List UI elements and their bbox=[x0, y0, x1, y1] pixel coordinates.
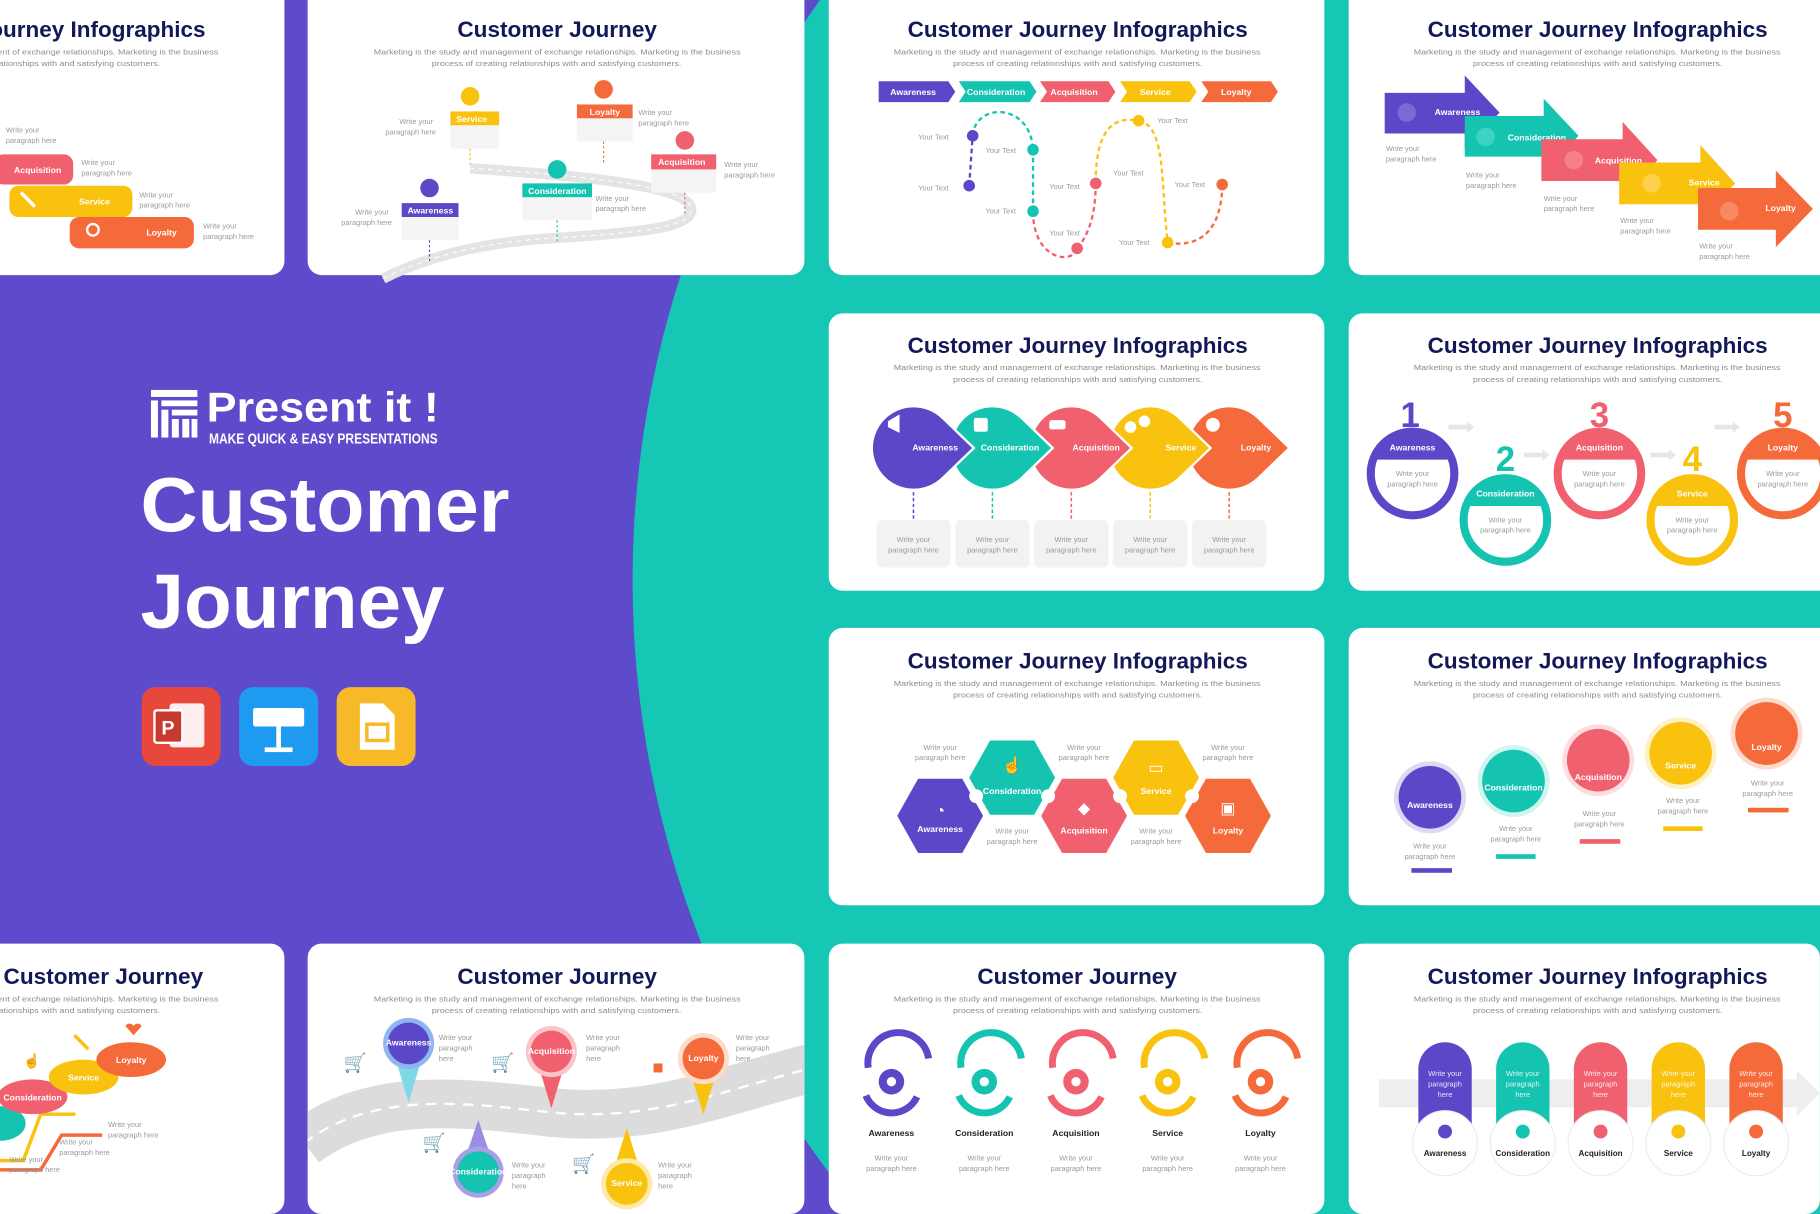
panel: card J road pins: here bbox=[512, 1181, 527, 1190]
panel: card J road pins: 🛒 bbox=[572, 1153, 595, 1175]
panel: card B road pins: Write your bbox=[355, 208, 389, 217]
panel: card K circular arrows bbox=[829, 944, 1324, 1214]
panel: card I (bottom-left partial): paragraph here bbox=[108, 1130, 159, 1139]
panel: card G hexagons: Consideration bbox=[983, 786, 1041, 796]
panel: card A (top-left partial): Write your bbox=[81, 158, 115, 167]
panel: card A (top-left partial): Loyalty bbox=[146, 228, 177, 238]
panel: card L capsules: Consideration bbox=[1496, 1149, 1550, 1158]
panel: card J road pins: process of creating relationships with and satisfying customers. bbox=[432, 1006, 681, 1015]
panel: card B road pins: paragraph here bbox=[595, 204, 646, 213]
panel: card F numbered circles: Marketing is the study and management of exchange relationships. Marketing is the business bbox=[1414, 363, 1781, 372]
panel: card J road pins: Customer Journey bbox=[457, 964, 658, 989]
panel: card B road pins: Consideration bbox=[528, 186, 587, 196]
background teal circle bbox=[633, 0, 1820, 1214]
panel: card C wave: Your Text bbox=[1157, 116, 1188, 125]
panel: card E drops: paragraph here bbox=[967, 545, 1018, 554]
icon: google slides bbox=[337, 687, 416, 766]
panel: card F numbered circles: 2 bbox=[1496, 440, 1515, 479]
panel: card L capsules: here bbox=[1749, 1090, 1764, 1099]
panel: card A (top-left partial): Write your bbox=[139, 190, 173, 199]
panel: card B road pins: Loyalty bbox=[590, 107, 620, 117]
panel: card K circular arrows: Loyalty bbox=[1245, 1128, 1276, 1138]
panel: card D arrows: Marketing is the study and management of exchange relationships. Marketing is the business bbox=[1414, 48, 1781, 57]
panel: card D arrows: Write your bbox=[1466, 171, 1500, 180]
panel: card D arrows: Consideration bbox=[1508, 132, 1566, 142]
panel: card G hexagons: Write your bbox=[995, 826, 1029, 835]
panel: card F numbered circles: Write your bbox=[1583, 469, 1617, 478]
panel: card F numbered circles: 1 bbox=[1401, 396, 1420, 435]
panel: card J road pins: here bbox=[736, 1054, 751, 1063]
panel: card G hexagons: process of creating relationships with and satisfying customers. bbox=[953, 691, 1202, 700]
panel: card K circular arrows: Write your bbox=[875, 1154, 909, 1163]
panel: card E drops: paragraph here bbox=[888, 545, 939, 554]
panel: card D arrows: Write your bbox=[1544, 194, 1578, 203]
panel: card C wave: process of creating relationships with and satisfying customers. bbox=[953, 59, 1202, 68]
tagline: MAKE QUICK & EASY PRESENTATIONS bbox=[209, 430, 438, 447]
panel: card B road pins: Write your bbox=[724, 160, 758, 169]
panel: card H rising circles: Awareness bbox=[1407, 800, 1453, 810]
panel: card J road pins: paragraph bbox=[658, 1171, 692, 1180]
panel: card H rising circles: paragraph here bbox=[1405, 852, 1455, 861]
panel: card K circular arrows: Customer Journey bbox=[977, 964, 1178, 989]
panel: card G hexagons: ▭ bbox=[1148, 759, 1164, 777]
panel: card F numbered circles: paragraph here bbox=[1667, 526, 1718, 535]
panel: card J road pins: Write your bbox=[658, 1161, 692, 1170]
panel: card A (top-left partial): Write your bbox=[203, 222, 237, 231]
panel: card C wave: Marketing is the study and management of exchange relationships. Marketing is the business bbox=[894, 48, 1261, 57]
panel: card D arrows: paragraph here bbox=[1620, 226, 1671, 235]
panel: card I (bottom-left partial): Service bbox=[68, 1073, 99, 1083]
panel: card J road pins: Write your bbox=[736, 1033, 770, 1042]
panel: card C wave bbox=[829, 0, 1324, 275]
icon: powerpoint bbox=[142, 687, 221, 766]
panel: card H rising circles: Service bbox=[1665, 760, 1696, 770]
panel: card L capsules: Write your bbox=[1584, 1069, 1618, 1078]
panel: card G hexagons: Loyalty bbox=[1213, 825, 1243, 835]
panel: card B road pins: Marketing is the study and management of exchange relationships. Marketing is the business bbox=[374, 48, 741, 57]
panel: card J road pins: Awareness bbox=[386, 1038, 432, 1048]
panel: card C wave: Your Text bbox=[985, 146, 1016, 155]
panel: card L capsules: Write your bbox=[1662, 1069, 1696, 1078]
panel: card L capsules: process of creating relationships with and satisfying customers. bbox=[1473, 1006, 1722, 1015]
panel: card J road pins: here bbox=[439, 1054, 454, 1063]
panel: card K circular arrows: Write your bbox=[967, 1154, 1002, 1163]
panel: card J road pins: paragraph bbox=[512, 1171, 546, 1180]
panel: card B road pins: process of creating relationships with and satisfying customers. bbox=[432, 59, 681, 68]
panel: card B road pins bbox=[308, 0, 804, 279]
panel: card D arrows: Service bbox=[1689, 178, 1720, 188]
panel: card G hexagons: paragraph here bbox=[987, 837, 1037, 846]
panel: card H rising circles bbox=[1349, 628, 1820, 905]
icon: keynote bbox=[239, 687, 318, 766]
panel: card L capsules: paragraph bbox=[1506, 1079, 1540, 1088]
panel: card K circular arrows: paragraph here bbox=[959, 1164, 1010, 1173]
panel: card K circular arrows: Consideration bbox=[955, 1128, 1013, 1138]
panel: card E drops: paragraph here bbox=[1125, 545, 1176, 554]
panel: card I (bottom-left partial): paragraph here bbox=[9, 1165, 60, 1174]
logo text: Present it ! bbox=[207, 383, 439, 430]
chevrons bbox=[879, 81, 1278, 102]
panel: card J road pins: Write your bbox=[512, 1161, 546, 1170]
panel: card F numbered circles: Awareness bbox=[1390, 442, 1436, 452]
panel: card L capsules: Customer Journey Infographics bbox=[1428, 964, 1768, 989]
panel: card G hexagons: paragraph here bbox=[915, 753, 966, 762]
panel: card E drops: Service bbox=[1165, 442, 1196, 452]
panel: card E drops: paragraph here bbox=[1204, 545, 1254, 554]
panel: card I (bottom-left partial): Write your bbox=[108, 1120, 142, 1129]
panel: card A (top-left partial): paragraph here bbox=[6, 136, 57, 145]
panel: card J road pins: Service bbox=[611, 1178, 642, 1188]
panel: card L capsules: Service bbox=[1664, 1149, 1693, 1158]
panel: card C wave: Your Text bbox=[918, 183, 949, 192]
panel: card H rising circles: process of creating relationships with and satisfying customers. bbox=[1473, 691, 1722, 700]
panel: card L capsules: Write your bbox=[1428, 1069, 1462, 1078]
panel: card J road pins: Consideration bbox=[449, 1167, 507, 1177]
panel: left brand block bbox=[141, 383, 510, 766]
panel: card H rising circles: Acquisition bbox=[1575, 772, 1622, 782]
panel: card F numbered circles: Consideration bbox=[1476, 489, 1535, 499]
panel: card J road pins: here bbox=[658, 1181, 673, 1190]
panel: card E drops: Write your bbox=[1055, 535, 1089, 544]
panel: card L capsules: Awareness bbox=[1424, 1149, 1467, 1158]
panel: card I (bottom-left partial): Loyalty bbox=[116, 1055, 147, 1065]
chevrons: Awareness bbox=[890, 87, 936, 97]
panel: card B road pins: paragraph here bbox=[341, 218, 392, 227]
panel: card L capsules: Marketing is the study and management of exchange relationships. Marketing is the business bbox=[1414, 995, 1781, 1004]
panel: card A (top-left partial): Service bbox=[79, 196, 110, 206]
pins: Service bbox=[456, 114, 487, 124]
panel: card G hexagons: Write your bbox=[1139, 826, 1173, 835]
panel: card K circular arrows: Acquisition bbox=[1052, 1128, 1100, 1138]
panel: card G hexagons: ▣ bbox=[1220, 800, 1236, 818]
panel: card E drops: Loyalty bbox=[1241, 442, 1271, 452]
panel: card E drops bbox=[829, 313, 1324, 591]
panel: card L capsules: Write your bbox=[1506, 1069, 1540, 1078]
panel: card J road pins: 🛒 bbox=[344, 1052, 367, 1074]
panel: card K circular arrows: Write your bbox=[1059, 1154, 1093, 1163]
panel: card G hexagons: paragraph here bbox=[1059, 753, 1109, 762]
panel: card C wave: Your Text bbox=[1119, 238, 1149, 247]
panel: card E drops: process of creating relationships with and satisfying customers. bbox=[953, 375, 1202, 384]
panel: card F numbered circles: Loyalty bbox=[1768, 442, 1798, 452]
panel: card G hexagons: paragraph here bbox=[1203, 753, 1253, 762]
panel: card E drops: Awareness bbox=[912, 442, 958, 452]
panel: card J road pins: Loyalty bbox=[688, 1053, 719, 1063]
icon: powerpoint: P bbox=[161, 718, 175, 740]
panel: card I (bottom-left partial) bbox=[0, 944, 284, 1214]
panel: card E drops: paragraph here bbox=[1046, 545, 1097, 554]
chevrons: Loyalty bbox=[1221, 87, 1252, 97]
panel: card A (top-left partial): Acquisition bbox=[14, 165, 61, 175]
panel: card A (top-left partial): Write your bbox=[6, 125, 40, 134]
panel: card J road pins: Marketing is the study and management of exchange relationships. Marketing is the business bbox=[374, 995, 741, 1004]
panel: card J road pins: paragraph bbox=[736, 1043, 770, 1052]
panel: card F numbered circles: paragraph here bbox=[1574, 479, 1625, 488]
panel: card A (top-left partial): paragraph here bbox=[139, 201, 190, 210]
panel: card J road pins: Acquisition bbox=[528, 1046, 575, 1056]
panel: card A (top-left partial): paragraph here bbox=[203, 232, 254, 241]
panel: card L capsules: Write your bbox=[1739, 1069, 1773, 1078]
panel: card G hexagons: Acquisition bbox=[1060, 825, 1108, 835]
road bbox=[383, 168, 691, 279]
panel: card B road pins: Customer Journey bbox=[457, 17, 658, 42]
panel: card F numbered circles: process of creating relationships with and satisfying customers. bbox=[1473, 375, 1722, 384]
panel: card K circular arrows: Awareness bbox=[869, 1128, 914, 1138]
panel: card C wave: Your Text bbox=[1049, 229, 1080, 238]
panel: card L capsules: here bbox=[1671, 1090, 1686, 1099]
panel: card E drops: Acquisition bbox=[1072, 442, 1120, 452]
panel: card F numbered circles: Write your bbox=[1489, 515, 1523, 524]
panel: card B road pins: paragraph here bbox=[638, 118, 689, 127]
panel: card D arrows: Write your bbox=[1699, 241, 1733, 250]
panel: card C wave: Your Text bbox=[1113, 168, 1144, 177]
panel: card D arrows: paragraph here bbox=[1386, 154, 1437, 163]
panel: card K circular arrows: paragraph here bbox=[866, 1164, 917, 1173]
panel: card H rising circles: Write your bbox=[1751, 779, 1785, 788]
panel: card D arrows: paragraph here bbox=[1466, 181, 1517, 190]
panel: card A (top-left partial): paragraph here bbox=[81, 168, 132, 177]
panel: card C wave: Your Text bbox=[1175, 180, 1205, 189]
panel: card F numbered circles bbox=[1349, 313, 1820, 591]
panel: card G hexagons: Customer Journey Infographics bbox=[908, 649, 1248, 674]
panel: card H rising circles: Loyalty bbox=[1751, 742, 1782, 752]
panel: card D arrows: process of creating relationships with and satisfying customers. bbox=[1473, 59, 1722, 68]
panel: card F numbered circles: 3 bbox=[1590, 396, 1609, 435]
panel: card F numbered circles: Customer Journey Infographics bbox=[1428, 333, 1768, 358]
panel: card C wave: Your Text bbox=[918, 132, 949, 141]
panel: card H rising circles: paragraph here bbox=[1742, 789, 1793, 798]
panel: card K circular arrows: paragraph here bbox=[1142, 1164, 1193, 1173]
panel: card H rising circles: Write your bbox=[1666, 796, 1700, 805]
panel: card L capsules: Acquisition bbox=[1578, 1149, 1623, 1158]
panel: card H rising circles: Write your bbox=[1499, 824, 1533, 833]
panel: card K circular arrows: Marketing is the study and management of exchange relationships. Marketing is the business bbox=[894, 995, 1261, 1004]
panel: card J road pins: here bbox=[586, 1054, 601, 1063]
panel: card E drops: Customer Journey Infographics bbox=[908, 333, 1248, 358]
panel: card F numbered circles: Write your bbox=[1396, 469, 1430, 478]
panel: card F numbered circles: Write your bbox=[1766, 469, 1800, 478]
panel: card D arrows: Write your bbox=[1620, 216, 1654, 225]
panel: card E drops: Write your bbox=[897, 535, 931, 544]
panel: card G hexagons: Write your bbox=[1211, 743, 1245, 752]
panel: card G hexagons: ☝ bbox=[1002, 755, 1022, 776]
panel: card B road pins: Write your bbox=[399, 117, 433, 126]
panel: card G hexagons: ◆ bbox=[1078, 800, 1091, 818]
panel: card D arrows: Acquisition bbox=[1595, 156, 1642, 166]
panel: card E drops: Write your bbox=[976, 535, 1010, 544]
main title: Customer bbox=[141, 464, 510, 549]
panel: card H rising circles: Consideration bbox=[1484, 782, 1543, 792]
panel: card H rising circles: Customer Journey Infographics bbox=[1428, 649, 1768, 674]
panel: card A (top-left partial) bbox=[0, 0, 284, 275]
chevrons: Consideration bbox=[967, 87, 1025, 97]
dashed wave bbox=[969, 112, 1222, 257]
panel: card K circular arrows: process of creating relationships with and satisfying customers. bbox=[953, 1006, 1202, 1015]
panel: card I (bottom-left partial): Consideration bbox=[3, 1092, 62, 1102]
panel: card H rising circles: paragraph here bbox=[1574, 819, 1625, 828]
panel: card H rising circles: Write your bbox=[1583, 809, 1617, 818]
panel: card E drops: Consideration bbox=[981, 442, 1039, 452]
panel: card K circular arrows: Service bbox=[1152, 1128, 1183, 1138]
panel: card I (bottom-left partial): paragraph here bbox=[59, 1148, 110, 1157]
icon: logo bbox=[151, 390, 197, 438]
panel: card D arrows: Loyalty bbox=[1765, 203, 1796, 213]
panel: card L capsules: paragraph bbox=[1661, 1079, 1695, 1088]
panel: card L capsules: here bbox=[1438, 1090, 1452, 1099]
panel: card L capsules: paragraph bbox=[1428, 1079, 1462, 1088]
panel: card D arrows: paragraph here bbox=[1699, 252, 1750, 261]
panel: card I (bottom-left partial): Write your bbox=[59, 1137, 93, 1146]
panel: card F numbered circles: 4 bbox=[1683, 440, 1703, 479]
panel: card F numbered circles: paragraph here bbox=[1480, 526, 1531, 535]
panel: card B road pins: paragraph here bbox=[724, 171, 775, 180]
panel: card L capsules: Loyalty bbox=[1742, 1149, 1771, 1158]
panel: card J road pins: 🛒 bbox=[491, 1052, 514, 1074]
panel: card F numbered circles: paragraph here bbox=[1387, 479, 1438, 488]
panel: card I (bottom-left partial): ☝ bbox=[23, 1051, 41, 1069]
panel: card D arrows: Customer Journey Infographics bbox=[1428, 17, 1768, 42]
panel: card K circular arrows: paragraph here bbox=[1235, 1164, 1286, 1173]
panel: card C wave: Customer Journey Infographics bbox=[908, 17, 1248, 42]
panel: card C wave: Your Text bbox=[985, 207, 1016, 216]
panel: card J road pins: Write your bbox=[439, 1033, 473, 1042]
panel: card E drops: Write your bbox=[1212, 535, 1246, 544]
panel: card K circular arrows: Write your bbox=[1151, 1154, 1185, 1163]
panel: card G hexagons: ◔ bbox=[935, 802, 945, 820]
panel: card B road pins: Acquisition bbox=[658, 157, 705, 167]
panel: card J road pins bbox=[304, 944, 813, 1214]
panel: card B road pins: Write your bbox=[638, 108, 673, 117]
panel: card J road pins: ■ bbox=[653, 1057, 664, 1078]
panel: card D arrows: Awareness bbox=[1435, 107, 1480, 117]
panel: card I (bottom-left partial): Customer Journey bbox=[4, 964, 204, 989]
panel: card E drops: Marketing is the study and management of exchange relationships. Marketing is the business bbox=[894, 363, 1261, 372]
panel: card J road pins: Write your bbox=[586, 1033, 620, 1042]
panel: card F numbered circles: Service bbox=[1677, 489, 1708, 499]
panel: card K circular arrows: Write your bbox=[1244, 1154, 1278, 1163]
panel: card G hexagons bbox=[829, 628, 1324, 905]
panel: card L capsules: here bbox=[1515, 1090, 1530, 1099]
panel: card G hexagons: Awareness bbox=[917, 824, 963, 834]
panel: card J road pins: paragraph bbox=[439, 1043, 473, 1052]
pins bbox=[450, 87, 499, 166]
panel: card D arrows: Write your bbox=[1386, 144, 1420, 153]
panel: card G hexagons: Marketing is the study and management of exchange relationships. Marketing is the business bbox=[894, 679, 1261, 688]
panel: card B road pins: Awareness bbox=[407, 206, 453, 216]
panel: card G hexagons: Service bbox=[1141, 786, 1172, 796]
panel: card H rising circles: paragraph here bbox=[1658, 807, 1708, 816]
panel: card G hexagons: Write your bbox=[1067, 743, 1101, 752]
panel: card C wave: Your Text bbox=[1049, 182, 1080, 191]
panel: card D arrows: paragraph here bbox=[1544, 204, 1594, 213]
panel: card E drops: Write your bbox=[1133, 535, 1168, 544]
panel: card G hexagons: paragraph here bbox=[1131, 837, 1181, 846]
panel: card B road pins: paragraph here bbox=[385, 128, 436, 137]
panel: card J road pins: paragraph bbox=[586, 1043, 620, 1052]
panel: card D arrows bbox=[1349, 0, 1820, 275]
panel: card L capsules: here bbox=[1593, 1090, 1608, 1099]
panel: card G hexagons: Write your bbox=[923, 743, 958, 752]
panel: card I (bottom-left partial): Write your bbox=[9, 1155, 44, 1164]
panel: card L capsules: paragraph bbox=[1584, 1079, 1617, 1088]
panel: card H rising circles: Write your bbox=[1413, 841, 1447, 850]
panel: card K circular arrows: paragraph here bbox=[1051, 1164, 1101, 1173]
panel: card L capsules: paragraph bbox=[1739, 1079, 1773, 1088]
panel: card B road pins: Write your bbox=[595, 194, 630, 203]
panel: card H rising circles: Marketing is the study and management of exchange relationships. Marketing is the business bbox=[1414, 679, 1781, 688]
panel: card L capsules bbox=[1349, 944, 1820, 1214]
panel: card H rising circles: paragraph here bbox=[1491, 834, 1541, 843]
panel: card F numbered circles: Acquisition bbox=[1576, 442, 1623, 452]
chevrons: Acquisition bbox=[1050, 87, 1098, 97]
panel: card F numbered circles: 5 bbox=[1773, 396, 1792, 435]
panel: card J road pins: 🛒 bbox=[423, 1132, 446, 1154]
panel: card F numbered circles: Write your bbox=[1675, 515, 1710, 524]
panel: card F numbered circles: paragraph here bbox=[1757, 479, 1808, 488]
chevrons: Service bbox=[1140, 87, 1171, 97]
panel: left brand block: Journey bbox=[141, 560, 445, 645]
